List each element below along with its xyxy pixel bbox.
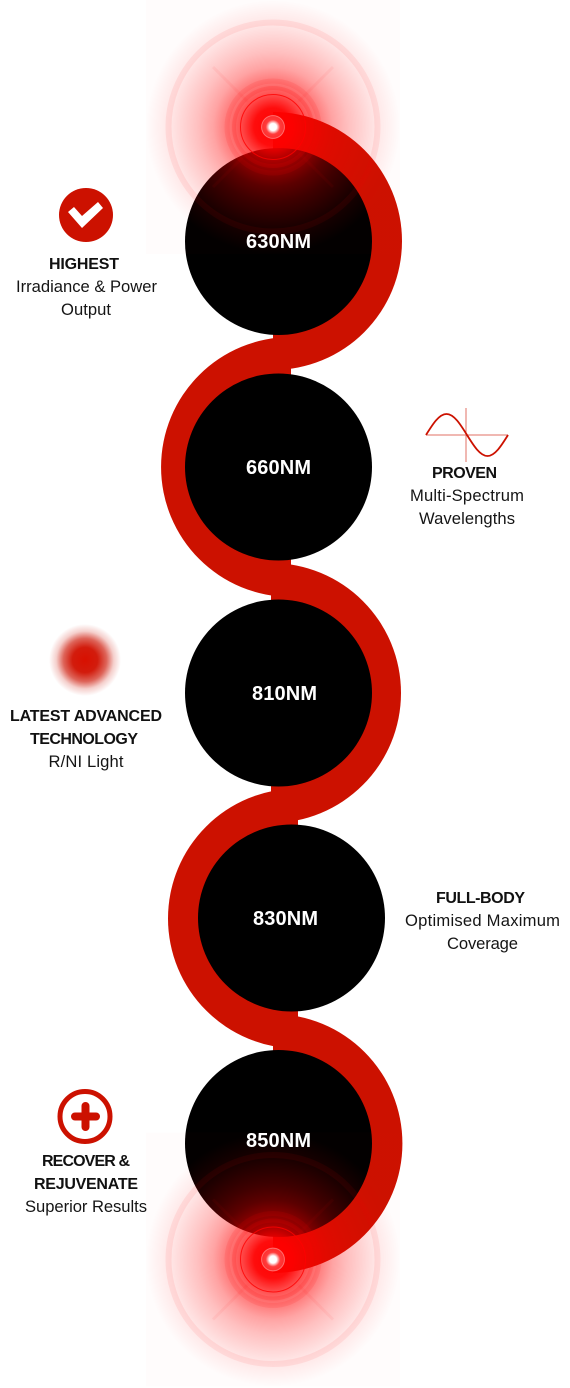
label: 660NM: 660NM: [246, 457, 311, 479]
icon: blurred red dot: [49, 624, 121, 696]
text: highest: Output: [61, 300, 111, 319]
text: proven: PROVEN: [432, 465, 497, 482]
text: recover and rejuvenate: Superior Results: [25, 1197, 147, 1216]
text: full-body: Optimised Maximum: [405, 911, 560, 930]
text: proven: Wavelengths: [419, 509, 515, 528]
label: 850NM: 850NM: [246, 1130, 311, 1152]
top light flare: [146, 0, 400, 254]
text: full-body: FULL-BODY: [436, 890, 525, 907]
text: full-body: Coverage: [447, 934, 518, 953]
icon: check mark: [59, 188, 113, 242]
text: latest advanced technology: [10, 708, 162, 771]
text: highest: [16, 256, 157, 319]
red wave ribbon: [161, 112, 402, 1273]
text: recover and rejuvenate: REJUVENATE: [34, 1176, 138, 1193]
text: proven: Multi-Spectrum: [410, 486, 524, 505]
circle: 660nm: [185, 374, 372, 560]
circle: 630nm: [185, 148, 372, 335]
bottom light flare: [146, 1132, 400, 1386]
circle: 850nm: [185, 1050, 372, 1237]
text: recover and rejuvenate: [25, 1153, 147, 1216]
text: latest advanced technology: TECHNOLOGY: [30, 731, 138, 748]
text: recover and rejuvenate: RECOVER &: [42, 1153, 130, 1170]
label: 830NM: 830NM: [253, 908, 318, 930]
text: latest advanced technology: LATEST ADVANCED: [10, 708, 162, 725]
icon: sine wave: [426, 408, 508, 462]
text: proven: [410, 465, 524, 528]
text: latest advanced technology: R/NI Light: [48, 752, 124, 771]
label: 810NM: 810NM: [252, 683, 317, 705]
text: highest: HIGHEST: [49, 256, 119, 273]
text: highest: Irradiance & Power: [16, 277, 157, 296]
icon: plus in ring: [60, 1092, 110, 1142]
circle: 810nm: [185, 600, 372, 786]
circle: 830nm: [198, 824, 385, 1012]
label: 630NM: 630NM: [246, 231, 311, 253]
text: full-body: [405, 890, 560, 953]
